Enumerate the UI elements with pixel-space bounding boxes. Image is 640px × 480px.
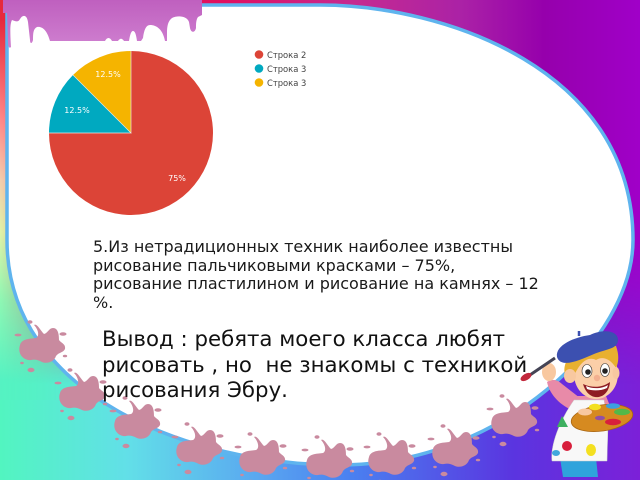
mouth <box>583 382 610 397</box>
slice: 75% <box>49 51 213 215</box>
hand <box>542 363 556 381</box>
head <box>574 349 618 399</box>
ear right <box>612 367 620 379</box>
pie chart <box>49 51 213 215</box>
legend: Строка 3 <box>267 64 306 74</box>
hair <box>564 345 618 376</box>
slice: 12.5% teal <box>49 75 131 133</box>
palette <box>569 401 635 435</box>
label 12.5% teal: 12.5% <box>64 106 90 115</box>
paint splats <box>14 320 539 480</box>
eyes <box>582 364 592 378</box>
text block: survey finding: 5.Из нетрадиционных техник наиболее известны рисование пальчиковыми красками – 75%, рисование пластилином и рисование на камнях – 12 %. <box>93 237 539 312</box>
beret stem <box>578 331 580 336</box>
apron <box>552 400 608 461</box>
paint drip banner <box>3 0 202 48</box>
beret <box>557 331 618 363</box>
ear <box>564 369 576 383</box>
apron paint <box>557 416 568 427</box>
legend: Строка 2 <box>267 50 306 60</box>
nose <box>594 375 600 381</box>
raised arm <box>547 380 580 410</box>
label 75%: 75% <box>168 174 186 183</box>
legend <box>255 50 306 88</box>
slice: 12.5% yellow <box>73 51 131 133</box>
icon: painter boy <box>519 331 635 477</box>
shirt collar <box>570 396 610 406</box>
legs <box>560 458 598 477</box>
label 12.5% yellow: 12.5% <box>95 70 121 79</box>
legend: Строка 3 <box>267 78 306 88</box>
text block: conclusion: Вывод : ребята моего класса любят рисовать , но не знакомы с техникой рисования Эбру. <box>102 327 527 403</box>
paintbrush <box>527 358 555 377</box>
